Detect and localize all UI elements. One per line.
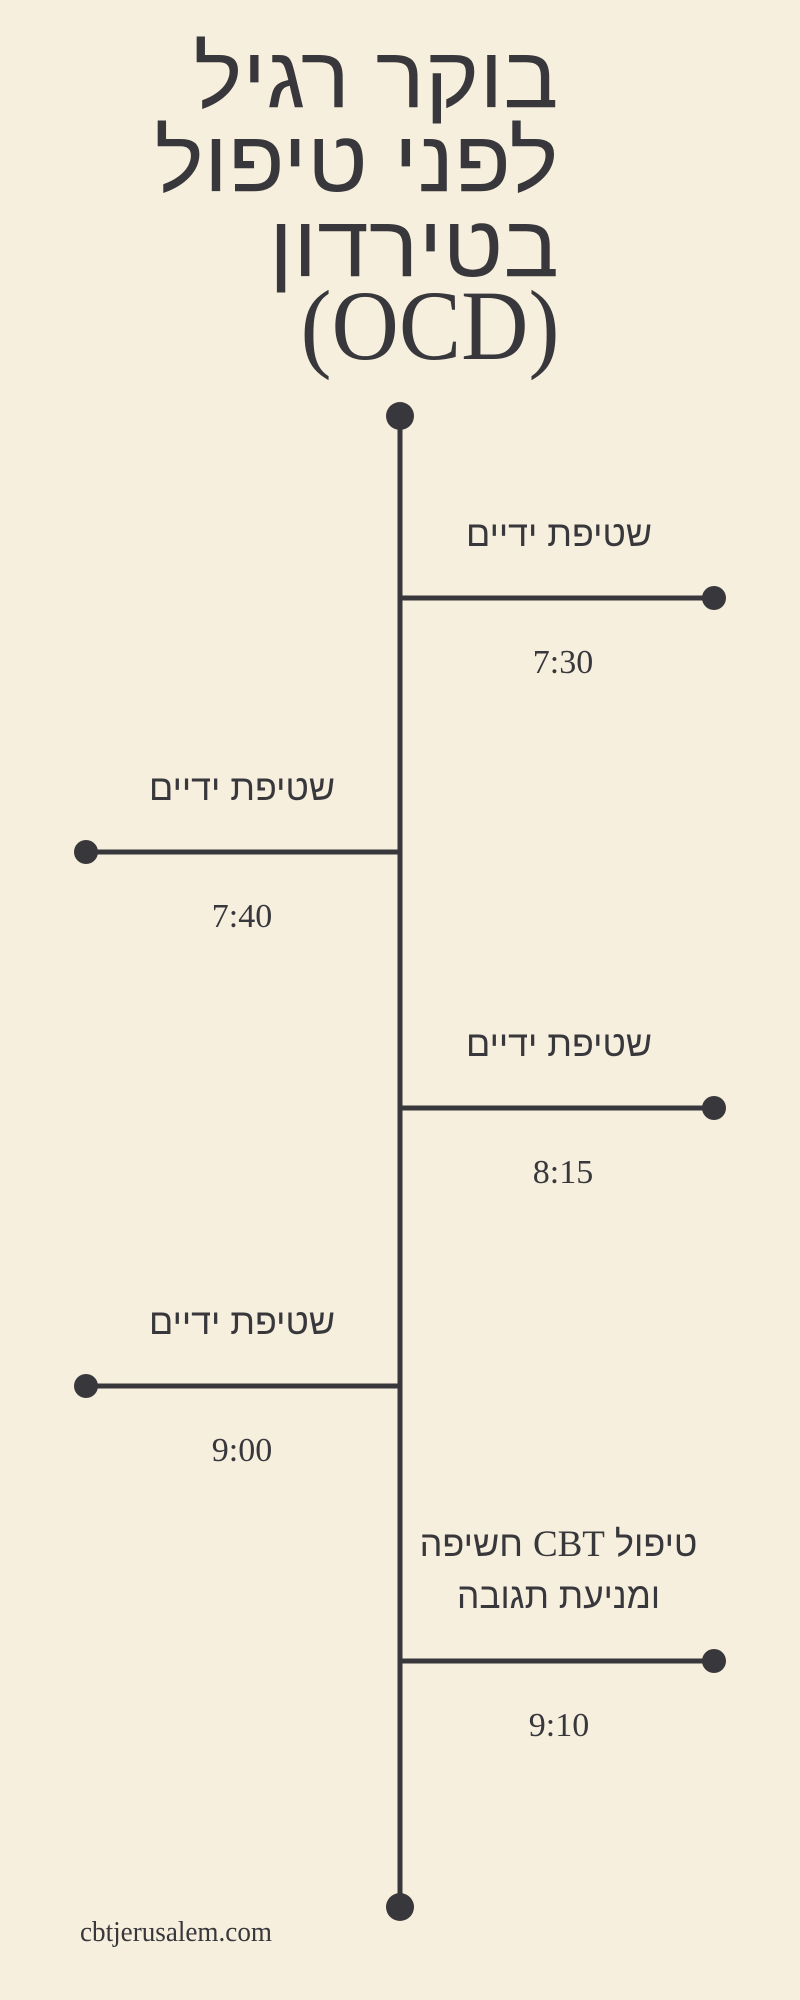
event 1: 7:30: שטיפת ידיים [466,513,652,554]
event 2: 7:40: שטיפת ידיים [149,767,335,808]
event 5: 9:10: 9:10 [529,1707,589,1744]
timeline spine [386,402,414,1921]
event 3: 8:15: 8:15 [533,1154,593,1191]
title: (OCD) [300,270,560,381]
event 3: 8:15 [400,1023,726,1191]
footer website: cbtjerusalem.com [80,1917,272,1948]
title [154,29,560,381]
event 2: 7:40: 7:40 [212,898,272,935]
event 4: 9:00 [74,1301,400,1469]
event 5: 9:10 [400,1523,726,1744]
event 4: 9:00: שטיפת ידיים [149,1301,335,1342]
title: בוקר רגיל [194,29,558,126]
event 4: 9:00: 9:00 [212,1432,272,1469]
title: בטירדון [269,198,559,295]
event 1: 7:30: 7:30 [533,644,593,681]
event 2: 7:40 [74,767,400,935]
event 5: 9:10: טיפול CBT חשיפה [420,1523,697,1565]
event 3: 8:15: שטיפת ידיים [466,1023,652,1064]
event 5: 9:10: ומניעת תגובה [457,1575,660,1616]
title: לפני טיפול [154,113,558,210]
event 1: 7:30 [400,513,726,681]
